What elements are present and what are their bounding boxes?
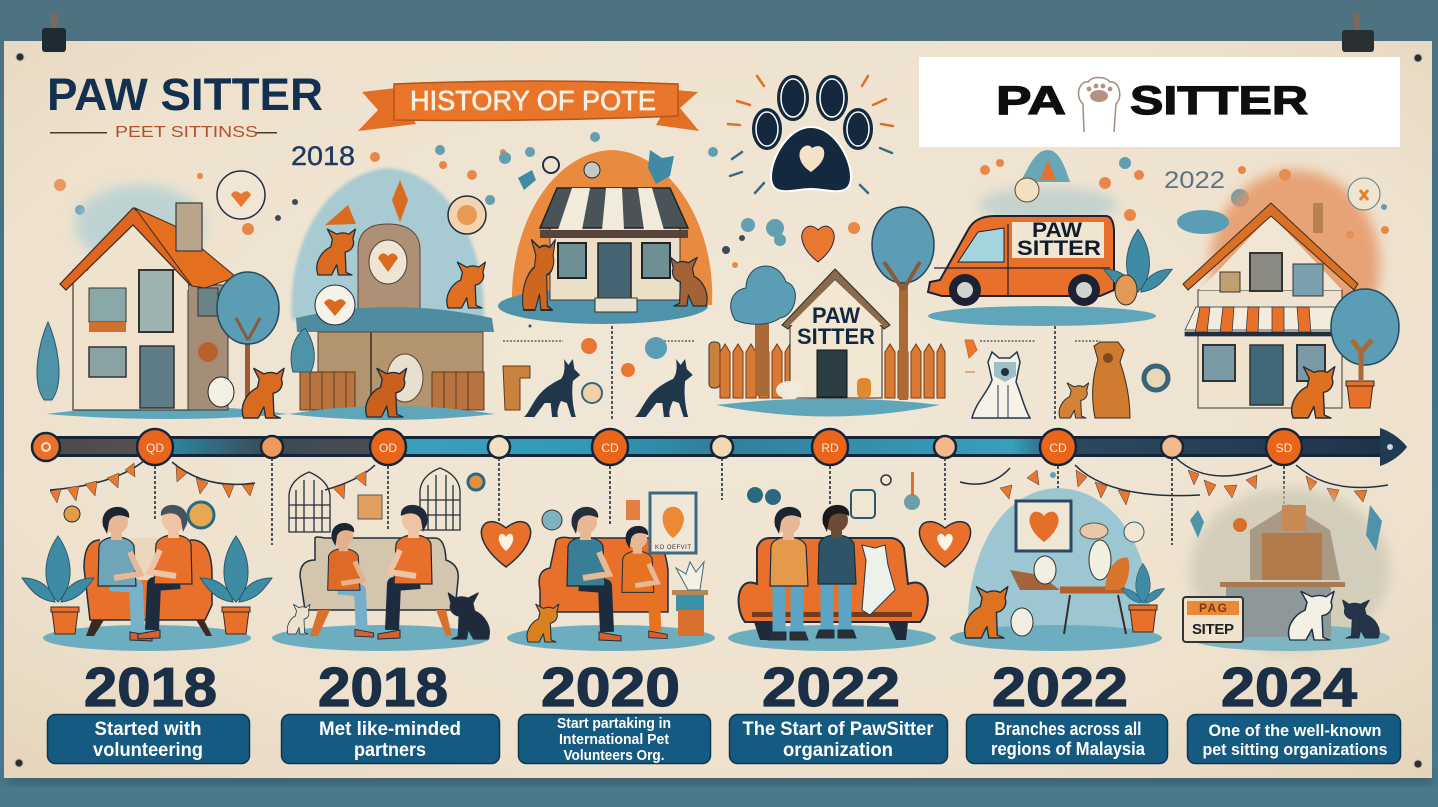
heart: [802, 226, 834, 262]
timeline bar: [32, 428, 1407, 466]
title: PAW SITTER: [47, 69, 323, 120]
year: 2024: 2024: [1221, 656, 1357, 718]
caption: branches across malaysia: [966, 714, 1168, 764]
title: [47, 69, 323, 141]
caption: international pet volunteers: International Pet: [559, 732, 669, 748]
caption: met like-minded partners: partners: [354, 740, 426, 761]
scene: couple on grey sofa: [272, 468, 490, 651]
year label: 2018 upper: 2018: [291, 141, 355, 171]
framed heart picture: [1016, 501, 1071, 551]
caption: international pet volunteers: [518, 714, 710, 764]
striped awning: [1185, 307, 1335, 336]
scene: dark dogs divider: [503, 326, 720, 421]
van sign: SITTER: [1017, 237, 1101, 260]
sign: PAG: [1199, 601, 1227, 615]
icon: heart medallion: [217, 171, 265, 219]
tree: [217, 272, 279, 409]
caption: start of pawsitter: [730, 714, 948, 764]
bunting strings: [50, 458, 1388, 505]
subtitle: PEET SITTINSS: [115, 124, 258, 141]
timeline nodes: [32, 429, 1302, 465]
timeline bar: CD: [1049, 441, 1067, 455]
caption: well-known organizations: One of the well-known: [1208, 721, 1382, 740]
caption: international pet volunteers: Start partaking in: [557, 716, 671, 732]
pin: top left clip: [42, 14, 66, 52]
icon: bird cages: [289, 468, 460, 532]
caption: branches across malaysia: Branches across all: [994, 719, 1142, 739]
scene: dog house: [716, 207, 945, 416]
white dog: [862, 545, 895, 615]
scene: pets pair: [965, 326, 1168, 421]
icon: large paw print: [728, 76, 893, 193]
logo: white box: PA: [996, 79, 1066, 123]
caption: start of pawsitter: organization: [783, 740, 893, 761]
caption: started with volunteering: volunteering: [93, 740, 203, 761]
scene: workspace room: [950, 488, 1165, 651]
scene: delivery van: [928, 150, 1172, 326]
caption: international pet volunteers: Volunteers Org.: [564, 748, 664, 764]
sign: [1183, 597, 1243, 642]
woman: [98, 507, 152, 641]
dark dog left: [524, 359, 580, 417]
scene: final organization: [1183, 488, 1390, 652]
caption: well-known organizations: [1188, 714, 1400, 764]
year label: 2022 upper: 2022: [1164, 167, 1225, 194]
year: 2020: 2020: [541, 656, 680, 718]
timeline bar: OD: [379, 441, 397, 455]
right tree: [872, 207, 934, 400]
scene: couple with pet on orange sofa: [728, 472, 936, 651]
scene: couple and child: [507, 493, 715, 651]
dashed connectors: [155, 458, 1284, 545]
caption: started with volunteering: [48, 714, 250, 764]
black dog: [448, 593, 489, 639]
orange dog: [1292, 367, 1335, 418]
scene: final shop house: [1177, 170, 1399, 418]
dark dog: [1343, 600, 1379, 638]
orange dog: [242, 368, 284, 418]
orange fox: [317, 229, 355, 275]
timeline bar: CD: [601, 441, 619, 455]
house sign text: [797, 303, 875, 349]
house sign text: SITTER: [797, 324, 875, 349]
caption: well-known organizations: pet sitting organizations: [1202, 740, 1388, 759]
decorative specks: [75, 132, 1393, 516]
icon: logo paw: [1079, 78, 1120, 132]
icon: hanging heart right: [919, 522, 971, 567]
caption: met like-minded partners: Met like-minded: [319, 719, 461, 740]
scene: shop with awning: [498, 150, 712, 324]
white heart bubble: [315, 285, 355, 325]
caption: start of pawsitter: The Start of PawSitter: [742, 719, 934, 740]
banner text: HISTORY OF POTE: [410, 85, 656, 116]
van sign: PAW: [1032, 219, 1082, 242]
white dog: [972, 352, 1030, 418]
logo: white box: SITTER: [1130, 79, 1308, 123]
year: 2018 second: 2018: [318, 656, 448, 718]
logo: white box: [919, 57, 1400, 147]
white dog: [1289, 591, 1334, 640]
year: 2018 first: 2018: [84, 656, 217, 718]
house sign text: PAW: [812, 303, 860, 328]
scene: second building: [288, 168, 495, 420]
orange cat: [447, 262, 485, 308]
van sign: [1012, 219, 1104, 260]
timeline bar: QD: [146, 441, 164, 455]
sign: SITEP: [1192, 621, 1234, 638]
caption: started with volunteering: Started with: [94, 719, 202, 740]
pin: top right clip: [1342, 14, 1374, 52]
poster shadow: [8, 770, 1432, 784]
timeline bar: RD: [821, 441, 839, 455]
caption: branches across malaysia: regions of Malaysia: [991, 739, 1146, 759]
dark dog right: [635, 359, 693, 417]
scene: first house: [37, 171, 288, 419]
man: [138, 505, 192, 639]
tall orange dog: [1093, 342, 1130, 418]
year: 2022 first: 2022: [762, 656, 900, 718]
banner ribbon: [358, 81, 699, 131]
tree in pot: [1331, 289, 1399, 408]
icon: hanging heart left: [481, 522, 531, 567]
caption: met like-minded partners: [282, 714, 500, 764]
left tree: [731, 266, 795, 396]
medallion: [448, 196, 486, 234]
framed picture: KO OEFVIT: [655, 545, 691, 551]
framed picture: [650, 493, 696, 553]
arrowhead: [1380, 428, 1407, 466]
year: 2022 second: 2022: [992, 656, 1128, 718]
scene: couple on orange sofa: [22, 502, 272, 651]
timeline bar: SD: [1276, 441, 1293, 455]
orange dog bottom: [366, 368, 407, 417]
